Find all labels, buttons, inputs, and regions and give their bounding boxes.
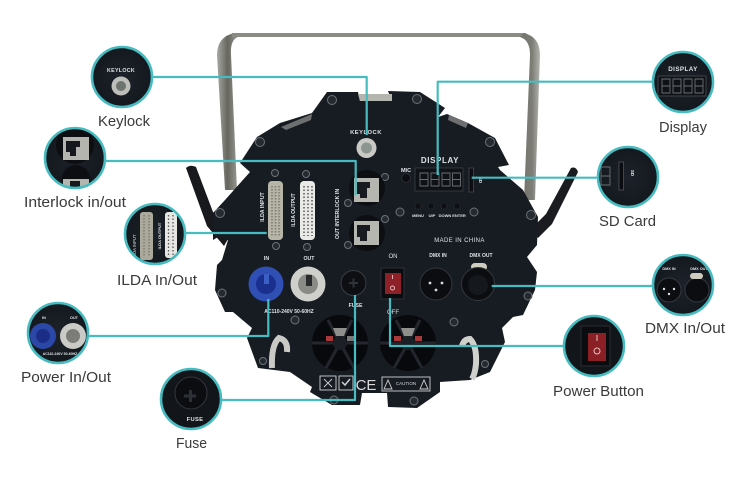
mic hole (402, 174, 410, 182)
callout: display: DISPLAY (668, 66, 698, 73)
panel body (213, 91, 538, 408)
RJ45 in (349, 170, 385, 206)
callout: SD card: SD (630, 170, 635, 177)
latch (471, 263, 487, 271)
CE mark: CE (356, 377, 376, 394)
callout: fuse: FUSE (187, 417, 203, 423)
label: power in/out: Power In/Out (21, 369, 112, 386)
screws (216, 94, 536, 405)
DMX out connector (462, 268, 494, 300)
callout: DMX: DMX IN (662, 267, 676, 271)
off label: OFF (387, 310, 399, 316)
button labels: DOWN (439, 213, 451, 218)
ILDA input label: ILDA INPUT (260, 191, 266, 222)
callout: power in/out (21, 303, 112, 386)
callout: power in/out: OUT (70, 316, 79, 320)
callout: display (653, 52, 713, 136)
label: display: Display (659, 119, 707, 136)
DB25 ILDA output (300, 181, 315, 240)
callout: ILDA (117, 204, 198, 289)
made in china: MADE IN CHINA (434, 238, 485, 244)
top side vents (281, 114, 468, 130)
callout: power button (553, 316, 644, 400)
RJ45 out (349, 215, 385, 251)
callout: interlock (24, 126, 127, 211)
label: power button: Power Button (553, 383, 644, 400)
callout: power in/out: IN (42, 316, 46, 320)
mic label: MIC (401, 168, 411, 174)
power in connector (248, 266, 284, 302)
keylock switch (356, 138, 376, 158)
top slot (358, 94, 392, 101)
SD label: SD (478, 177, 483, 184)
connector line: power button (390, 298, 565, 346)
keylock label: KEYLOCK (350, 130, 382, 136)
connector line: ILDA (184, 232, 267, 234)
callout: ILDA: ILDA INPUT (132, 234, 137, 257)
right eyebolt (462, 339, 476, 379)
callout: fuse (161, 369, 221, 452)
left eyebolt (272, 338, 287, 368)
connector line: keylock (150, 77, 367, 135)
right fan (380, 315, 436, 371)
DMX out label: DMX OUT (469, 253, 493, 259)
LED display (415, 168, 463, 191)
power out connector (290, 266, 326, 302)
connector line: fuse (220, 295, 355, 400)
certification marks (320, 376, 430, 391)
fuse label: FUSE (349, 303, 363, 309)
caution label: CAUTION (396, 381, 416, 386)
DMX in connector (420, 268, 452, 300)
power in label: IN (264, 256, 269, 262)
ILDA output label: ILDA OUTPUT (291, 193, 297, 227)
callout: SD card (598, 147, 658, 230)
button labels (412, 213, 466, 218)
left fan (312, 315, 368, 371)
on label: ON (388, 254, 398, 260)
label: fuse: Fuse (176, 435, 207, 452)
button labels: MENU (412, 213, 424, 218)
SD slot (469, 168, 474, 192)
label: SD card: SD Card (599, 213, 656, 230)
callout: keylock: KEYLOCK (107, 68, 135, 74)
label: DMX: DMX In/Out (645, 320, 726, 337)
left antenna (186, 166, 232, 246)
display heading: DISPLAY (421, 156, 459, 165)
callout: DMX (645, 255, 726, 337)
rocker switch (381, 268, 404, 299)
callout: keylock (92, 47, 152, 130)
connector line: interlock (104, 161, 356, 195)
fuse holder (341, 270, 366, 296)
metal bracket handle (217, 33, 540, 200)
right antenna (530, 168, 578, 238)
button labels: UIP (429, 213, 436, 218)
connector line: SD card (472, 177, 599, 179)
callout: DMX: DMX OUT (690, 267, 708, 271)
DB25 ILDA input (268, 181, 283, 240)
callout: power in/out: AC110-240V 50-60HZ (43, 352, 78, 356)
callout: ILDA: ILDA OUTPUT (157, 222, 162, 249)
product back panel (213, 91, 538, 408)
voltage label: AC110-240V 50-60HZ (264, 309, 314, 315)
power out label: OUT (304, 256, 315, 262)
label: keylock: Keylock (98, 113, 150, 130)
label: interlock: Interlock in/out (24, 194, 127, 211)
button labels: ENTER (452, 213, 466, 218)
connector line: DMX (492, 285, 654, 287)
DMX in label: DMX IN (429, 253, 447, 259)
interlock label: OUT INTERLOCK IN (335, 189, 341, 239)
menu buttons (415, 203, 460, 209)
connector line: display (438, 82, 654, 175)
label: ILDA: ILDA In/Out (117, 272, 198, 289)
connector line: power in/out (87, 299, 268, 336)
